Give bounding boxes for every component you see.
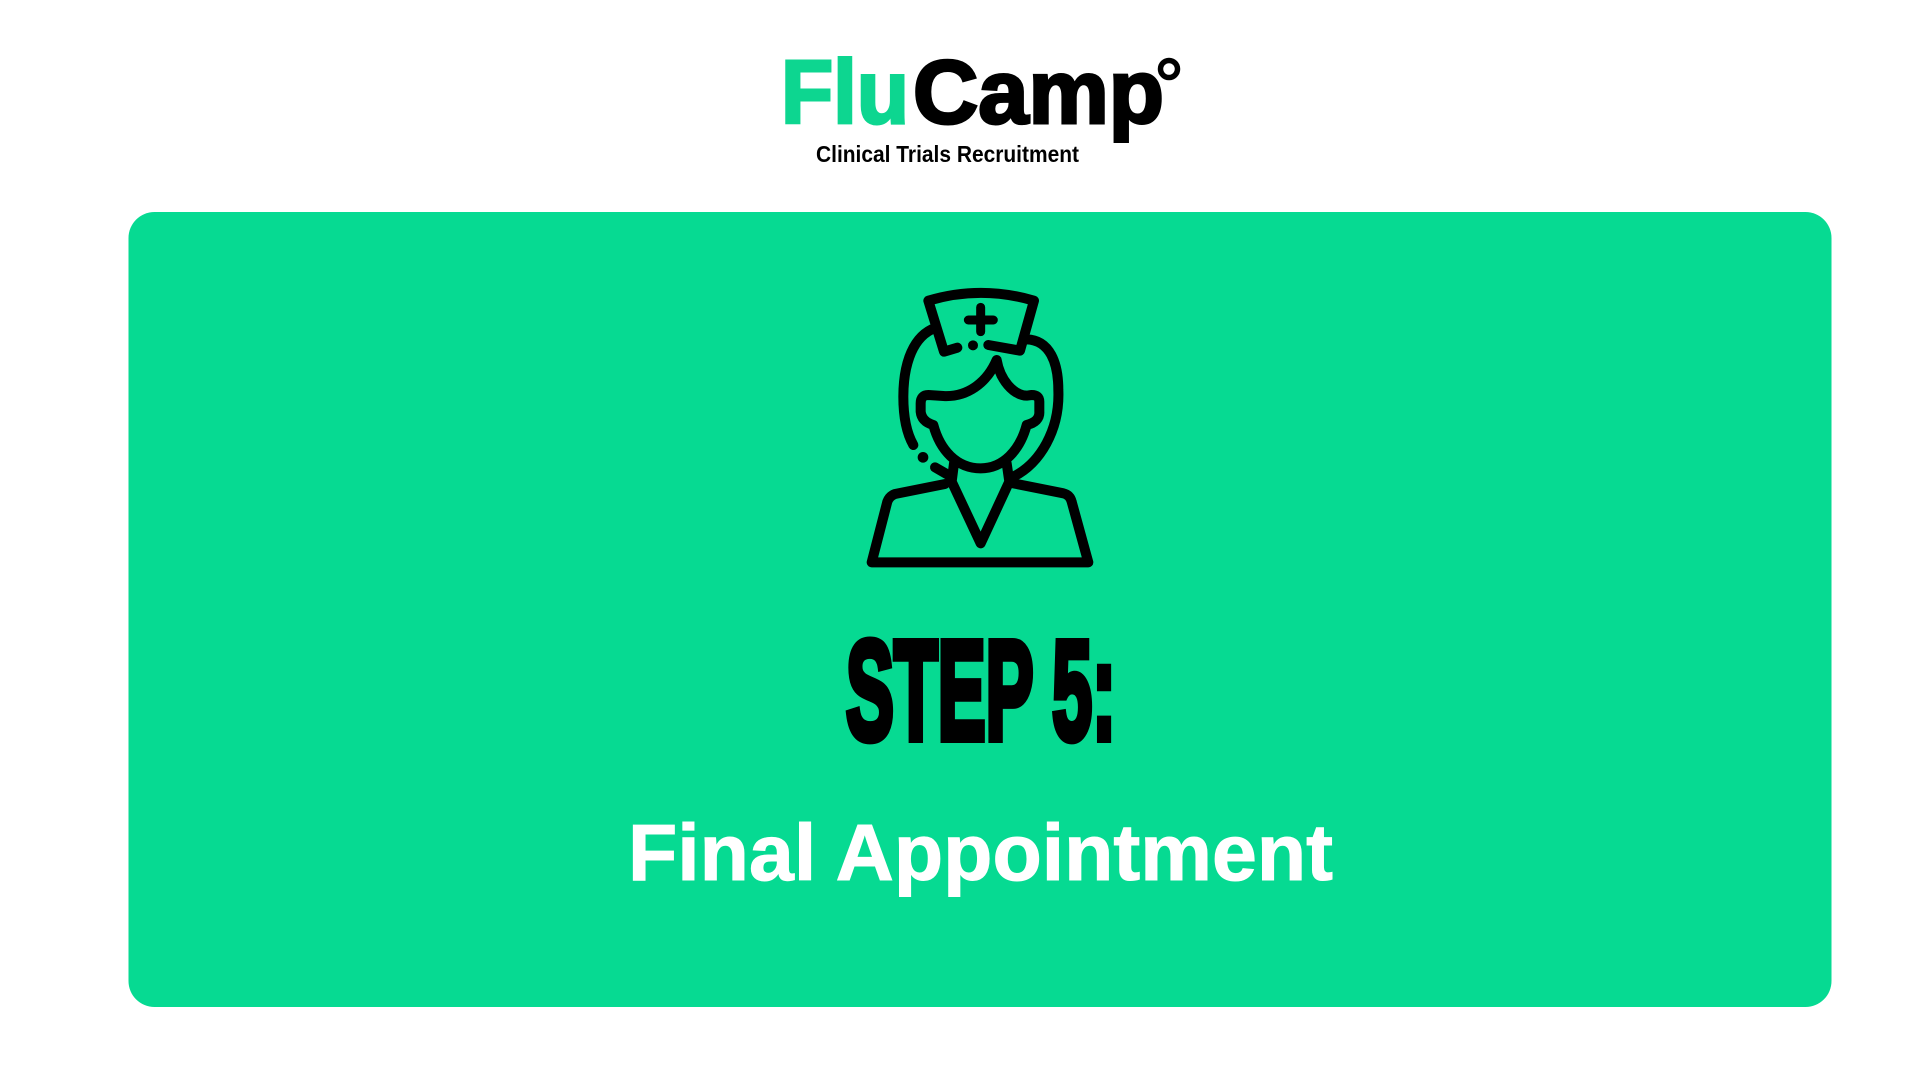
logo tagline: Clinical Trials Recruitment xyxy=(816,141,1079,167)
heading: STEP 5:: STEP 5: xyxy=(846,611,1116,769)
logo degree mark xyxy=(1160,60,1178,78)
shoulders xyxy=(872,483,1088,562)
logo: FluCamp xyxy=(781,43,1178,143)
hair left xyxy=(903,329,932,445)
nurse cap xyxy=(928,293,1034,352)
hair right xyxy=(1013,339,1058,477)
panel: step card xyxy=(128,212,1832,1007)
cap cross xyxy=(968,307,993,332)
hair dot xyxy=(918,452,928,463)
hair lower stroke xyxy=(935,467,948,475)
cap dot xyxy=(968,340,978,350)
icon: nurse xyxy=(872,293,1088,562)
logo wordmark Flu: Flu xyxy=(781,43,909,143)
face xyxy=(921,360,1039,468)
subheading: Final Appointment: Final Appointment xyxy=(628,808,1333,897)
logo wordmark Camp: Camp xyxy=(913,43,1164,143)
neck and collar xyxy=(952,463,1009,543)
